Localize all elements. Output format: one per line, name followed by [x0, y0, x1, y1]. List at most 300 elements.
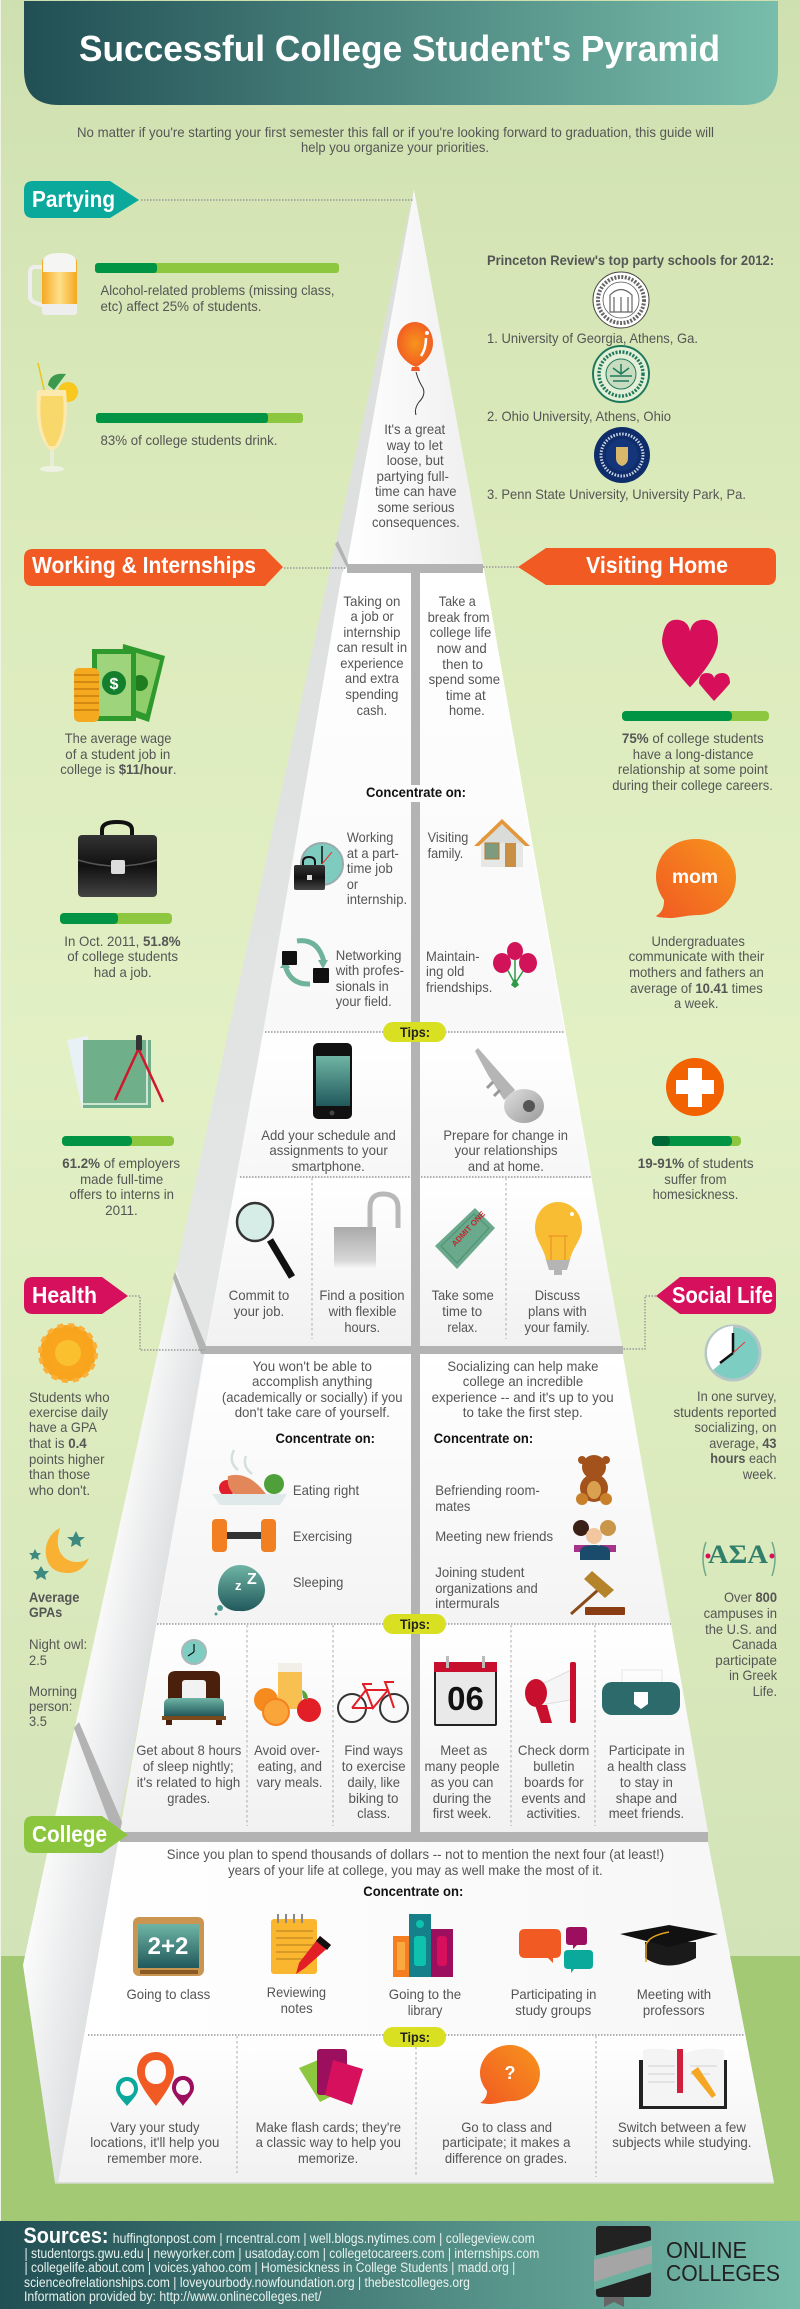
participate text: participate; it makes a — [442, 2134, 571, 2150]
homesickness bar and text: homesickness. — [653, 1186, 738, 1202]
sources: Information provided by: http://www.onlinecolleges.net/ — [24, 2289, 322, 2304]
networking text: your field. — [336, 993, 392, 1009]
study locations text: remember more. — [107, 2150, 202, 2166]
greek life text: Life. — [753, 1683, 777, 1699]
job bar and text — [60, 913, 181, 980]
tag: college — [24, 1816, 128, 1853]
relax text: Take some — [432, 1287, 494, 1303]
icon: sleep cloud — [214, 1565, 265, 1616]
reviewing notes text: Reviewing — [267, 1984, 326, 2000]
health class tip text: shape and — [616, 1790, 677, 1806]
exercise gpa text: who don't. — [28, 1482, 90, 1498]
tag: visiting home: Visiting Home — [586, 552, 728, 578]
working intro text: Taking on — [343, 593, 400, 609]
friendships text: Maintain- — [426, 948, 480, 964]
logo: online colleges — [594, 2226, 780, 2307]
home tip text — [443, 1127, 568, 1174]
tips divider 2: Tips: — [400, 1616, 430, 1632]
icon: balloon — [397, 322, 433, 415]
working intro text: spending — [345, 686, 398, 702]
alcohol bar and text: etc) affect 25% of students. — [100, 298, 262, 314]
greek life text: campuses in — [704, 1605, 777, 1621]
friendships text — [426, 948, 492, 995]
party schools: Princeton Review's top party schools for 2012: — [487, 252, 774, 268]
diet tip text — [254, 1742, 322, 1790]
sleep tip text: it's related to high — [137, 1774, 240, 1790]
tips divider 1: Tips: — [400, 1024, 430, 1040]
socializing text: In one survey, — [697, 1388, 777, 1404]
sources — [24, 2223, 539, 2304]
partying text: way to let — [386, 437, 443, 453]
health class tip text: meet friends. — [609, 1805, 684, 1821]
exercise tip text: Find ways — [344, 1742, 403, 1758]
reviewing notes text: notes — [281, 2000, 313, 2016]
health class tip text: Participate in — [609, 1742, 685, 1758]
exercise gpa text: have a GPA — [29, 1419, 98, 1435]
meet people tip text: many people — [424, 1758, 500, 1774]
relax text — [432, 1287, 494, 1335]
exercise gpa text: Students who — [29, 1389, 110, 1405]
socializing text: week. — [742, 1466, 777, 1482]
working intro text: experience — [340, 655, 404, 671]
exercise gpa text: than those — [29, 1466, 90, 1482]
exercise tip text — [342, 1742, 406, 1821]
icon: teddy bear — [576, 1455, 612, 1505]
befriending text: Befriending room- — [435, 1482, 540, 1498]
joining organizations text: intermurals — [435, 1595, 500, 1611]
study locations text: locations, it'll help you — [90, 2134, 219, 2150]
flash cards text — [256, 2119, 401, 2166]
icon: gym bag — [602, 1670, 680, 1715]
socializing text: hours each — [710, 1450, 776, 1466]
exercise gpa text: that is 0.4 — [29, 1435, 87, 1451]
mom text: mothers and fathers an — [629, 964, 764, 980]
tips divider 3 — [88, 2027, 745, 2177]
flash cards text: memorize. — [298, 2150, 358, 2166]
visiting home intro text: now and — [437, 640, 487, 656]
exercise gpa text: points higher — [29, 1451, 105, 1467]
discuss text: your family. — [524, 1319, 590, 1335]
sleep tip text: of sleep nightly; — [143, 1758, 234, 1774]
partying text: loose, but — [387, 452, 444, 468]
greek life text: in Greek — [729, 1667, 778, 1683]
meeting professors text — [637, 1986, 711, 2018]
college intro text: years of your life at college, you may as well make the most of it. — [228, 1862, 603, 1878]
exercise tip text: daily, like — [347, 1774, 400, 1790]
icon: roses — [493, 942, 537, 988]
icon: calendar — [434, 1656, 497, 1726]
health intro text: You won't be able to — [253, 1358, 372, 1374]
icon: question bubble — [480, 2045, 540, 2104]
visiting family text: Visiting — [428, 829, 468, 845]
tag: social life — [623, 1277, 776, 1349]
exercising text: Exercising — [293, 1528, 352, 1544]
social intro text: to take the first step. — [463, 1404, 583, 1420]
visiting home intro text: home. — [449, 702, 485, 718]
partying text: time can have — [375, 483, 457, 499]
meet people tip text: during the — [433, 1790, 492, 1806]
icon: smartphone — [313, 1043, 352, 1119]
icon: sun — [40, 1325, 96, 1381]
icon: moon and stars — [29, 1528, 89, 1580]
sleeping text: Sleeping — [293, 1574, 343, 1590]
working item text: at a part- — [347, 845, 399, 861]
icon: question bubble: ? — [504, 2063, 516, 2083]
concentrate on heading college: Concentrate on: — [363, 1883, 463, 1899]
joining organizations text: organizations and — [435, 1580, 538, 1596]
study locations text — [90, 2119, 219, 2166]
tips divider 1 — [265, 1022, 565, 1042]
party schools: 3. Penn State University, University Park, Pa. — [487, 486, 746, 502]
icon: graduation cap — [620, 1925, 718, 1966]
library text — [389, 1986, 461, 2018]
befriending text: mates — [435, 1498, 470, 1514]
tips divider 2 — [157, 1614, 671, 1826]
exercise tip text: to exercise — [342, 1758, 406, 1774]
average gpas text: GPAs — [29, 1604, 62, 1620]
smartphone tip text: Add your schedule and — [261, 1127, 396, 1143]
logo: online colleges: ONLINE — [666, 2237, 747, 2263]
icon: drafting tools — [67, 1035, 163, 1108]
health class tip text — [607, 1742, 686, 1821]
icon: magnifier — [237, 1203, 292, 1277]
working intro text: a job or — [350, 608, 394, 624]
relationship bar and text: during their college careers. — [612, 777, 773, 793]
icon: chalkboard — [133, 1917, 204, 1976]
title banner — [24, 1, 778, 105]
study groups text: study groups — [515, 2002, 591, 2018]
relationship bar and text: 75% of college students — [622, 730, 764, 746]
icon: clock and briefcase — [294, 843, 343, 890]
home tip text: your relationships — [455, 1142, 558, 1158]
switch subjects text: subjects while studying. — [612, 2134, 752, 2150]
bulletin tip text: activities. — [526, 1805, 580, 1821]
diet tip text: eating, and — [258, 1758, 322, 1774]
icon: money — [74, 644, 165, 722]
social intro text: experience -- and it's up to you — [432, 1389, 614, 1405]
seal: penn state — [594, 427, 650, 483]
icon: gavel — [571, 1571, 625, 1615]
sleep tip text — [136, 1742, 241, 1806]
job bar and text: In Oct. 2011, 51.8% — [64, 933, 181, 949]
icon: clock — [706, 1326, 760, 1380]
icon: megaphone — [525, 1662, 576, 1723]
mom text: communicate with their — [629, 948, 765, 964]
meet people tip text: Meet as — [440, 1742, 487, 1758]
partying text: partying full- — [376, 468, 449, 484]
joining organizations text — [435, 1564, 538, 1611]
alcohol bar and text — [95, 263, 339, 314]
icon: mom speech bubble: mom — [672, 867, 718, 888]
tag: visiting home — [483, 548, 776, 585]
drinking bar and text — [96, 413, 303, 448]
discuss text: Discuss — [535, 1287, 580, 1303]
exercise gpa text: exercise daily — [29, 1404, 108, 1420]
smartphone tip text: assignments to your — [269, 1142, 388, 1158]
relationship bar and text — [612, 711, 773, 793]
exercise tip text: biking to — [348, 1790, 399, 1806]
flexible hours text: hours. — [344, 1319, 380, 1335]
drinking bar and text: 83% of college students drink. — [100, 432, 278, 448]
tag: partying: Partying — [32, 186, 115, 212]
mom text: a week. — [674, 995, 718, 1011]
intro text: No matter if you're starting your first semester this fall or if you're looking forward to graduation, this guide will — [77, 124, 714, 140]
party schools: 1. University of Georgia, Athens, Ga. — [487, 330, 698, 346]
icon: sleep cloud: z — [235, 1578, 242, 1593]
wage text — [60, 730, 177, 777]
relax text: relax. — [447, 1319, 478, 1335]
relationship bar and text: have a long-distance — [633, 746, 754, 762]
bulletin tip text: Check dorm — [518, 1742, 589, 1758]
visiting home intro text: then to — [442, 656, 483, 672]
internship offers bar and text: made full-time — [80, 1171, 163, 1187]
meeting professors text: Meeting with — [637, 1986, 711, 2002]
social intro text: college an incredible — [463, 1373, 583, 1389]
internship offers bar and text: 2011. — [105, 1202, 138, 1218]
icon: books — [393, 1914, 453, 1977]
commit text: Commit to — [229, 1287, 289, 1303]
health intro text — [222, 1358, 402, 1420]
icon: alpha sigma alpha — [703, 1540, 775, 1576]
health intro text: don't take care of yourself. — [235, 1404, 390, 1420]
switch subjects text — [612, 2119, 752, 2150]
commit text: your job. — [234, 1303, 284, 1319]
icon: map pins — [116, 2052, 194, 2106]
exercise gpa text — [28, 1389, 110, 1498]
visiting home intro text: spend some — [429, 671, 500, 687]
meeting professors text: professors — [643, 2002, 705, 2018]
greek life text: Over 800 — [724, 1589, 777, 1605]
alcohol bar and text: Alcohol-related problems (missing class, — [100, 282, 334, 298]
concentrate on heading social: Concentrate on: — [434, 1430, 533, 1446]
icon: people — [573, 1520, 616, 1560]
sources: Sources: — [24, 2223, 108, 2248]
working intro text — [337, 593, 407, 718]
job bar and text: had a job. — [94, 964, 152, 980]
intro text — [77, 124, 714, 155]
icon: medical cross — [666, 1058, 724, 1116]
exercise tip text: class. — [357, 1805, 390, 1821]
meet people tip text — [424, 1742, 500, 1821]
average gpas text: person: — [29, 1698, 72, 1714]
seal: university of georgia — [593, 272, 649, 328]
greek life text: participate — [715, 1652, 777, 1668]
health class tip text: to stay in — [620, 1774, 673, 1790]
tag: college: College — [32, 1821, 107, 1847]
intro text: help you organize your priorities. — [301, 139, 489, 155]
health class tip text: a health class — [607, 1758, 686, 1774]
working intro text: and extra — [345, 670, 399, 686]
mom text: Undergraduates — [652, 933, 745, 949]
commit text — [229, 1287, 289, 1319]
bulletin tip text — [518, 1742, 589, 1821]
average gpas text — [29, 1589, 87, 1729]
concentrate on heading: Concentrate on: — [366, 784, 466, 800]
party schools — [487, 252, 774, 502]
tag: health — [24, 1277, 205, 1350]
study locations text: Vary your study — [110, 2119, 200, 2135]
socializing text: students reported — [674, 1404, 776, 1420]
wage text: of a student job in — [65, 746, 170, 762]
befriending text — [435, 1482, 540, 1514]
average gpas text: 2.5 — [29, 1652, 47, 1668]
icon: money: $ — [110, 676, 119, 693]
working intro text: internship — [343, 624, 401, 640]
homesickness bar and text: suffer from — [664, 1171, 726, 1187]
average gpas text: Average — [29, 1589, 80, 1605]
icon: notes and pencil — [271, 1914, 331, 1974]
participate text — [442, 2119, 571, 2166]
internship offers bar and text: 61.2% of employers — [62, 1155, 180, 1171]
health intro text: (academically or socially) if you — [222, 1389, 402, 1405]
tag: health: Health — [32, 1282, 97, 1308]
flash cards text: a classic way to help you — [256, 2134, 401, 2150]
friendships text: friendships. — [426, 979, 492, 995]
socializing text: socializing, on — [694, 1419, 776, 1435]
switch subjects text: Switch between a few — [618, 2119, 747, 2135]
tag: social life: Social Life — [672, 1282, 773, 1308]
homesickness bar and text: 19-91% of students — [638, 1155, 754, 1171]
partying text: consequences. — [372, 514, 460, 530]
dividers tier 2 tips — [240, 1177, 591, 1339]
average gpas text: Night owl: — [29, 1636, 87, 1652]
icon: admit ticket: ADMIT ONE — [450, 1209, 488, 1248]
sources: scienceofrelationships.com | loveyourbody.nowfoundation.org | thebestcolleges.org — [24, 2275, 470, 2290]
average gpas text: Morning — [29, 1683, 77, 1699]
meeting friends text: Meeting new friends — [435, 1528, 553, 1544]
average gpas text: 3.5 — [29, 1713, 47, 1729]
meet people tip text: as you can — [431, 1774, 493, 1790]
working item text: Working — [347, 829, 393, 845]
icon: calendar: 06 — [447, 1680, 484, 1717]
home tip text: and at home. — [468, 1158, 544, 1174]
title banner: Successful College Student's Pyramid — [79, 28, 720, 69]
diet tip text: vary meals. — [257, 1774, 322, 1790]
partying text: It's a great — [384, 421, 445, 437]
greek life text: Canada — [732, 1636, 777, 1652]
mom text: average of 10.41 times — [630, 980, 763, 996]
relationship bar and text: relationship at some point — [618, 761, 768, 777]
joining organizations text: Joining student — [435, 1564, 525, 1580]
social intro text — [432, 1358, 614, 1420]
icon: alpha sigma alpha: ΑΣΑ — [708, 1540, 768, 1569]
home tip text: Prepare for change in — [443, 1127, 568, 1143]
working intro text: cash. — [357, 702, 387, 718]
icon: hearts — [662, 620, 730, 701]
sources: huffingtonpost.com | rncentral.com | well.blogs.nytimes.com | collegeview.com — [113, 2231, 535, 2246]
diet tip text: Avoid over- — [254, 1742, 320, 1758]
socializing text: average, 43 — [709, 1435, 777, 1451]
icon: chat bubbles — [519, 1927, 593, 1973]
icon: sleep cloud: Z — [247, 1571, 257, 1588]
meet people tip text: first week. — [433, 1805, 491, 1821]
internship offers bar and text — [62, 1136, 180, 1218]
icon: open book — [639, 2049, 727, 2109]
bulletin tip text: boards for — [524, 1774, 584, 1790]
icon: dumbbell — [212, 1519, 276, 1552]
icon: bicycle — [338, 1682, 408, 1722]
networking text: Networking — [336, 947, 402, 963]
flexible hours text: Find a position — [319, 1287, 405, 1303]
visiting home intro text — [428, 593, 500, 718]
networking text: sionals in — [336, 978, 389, 994]
working intro text: can result in — [337, 639, 407, 655]
eating right text: Eating right — [293, 1482, 359, 1498]
icon: beer mug — [30, 253, 77, 315]
relax text: time to — [442, 1303, 482, 1319]
partying text — [372, 421, 460, 530]
bulletin tip text: events and — [521, 1790, 586, 1806]
icon: key — [475, 1048, 544, 1123]
discuss text — [524, 1287, 590, 1335]
party schools: 2. Ohio University, Athens, Ohio — [487, 408, 671, 424]
visiting family text: family. — [428, 845, 463, 861]
flash cards text: Make flash cards; they're — [256, 2119, 401, 2135]
partying text: some serious — [378, 499, 454, 515]
flexible hours text — [319, 1287, 405, 1335]
icon: food plate — [212, 1450, 287, 1505]
internship offers bar and text: offers to interns in — [69, 1186, 174, 1202]
job bar and text: of college students — [67, 948, 178, 964]
working item text: or — [347, 876, 358, 892]
college intro text: Since you plan to spend thousands of dollars -- not to mention the next four (at least!) — [167, 1846, 664, 1862]
sources: | collegelife.about.com | voices.yahoo.com | Homesickness in College Students | madd.org | — [24, 2260, 515, 2275]
wage text: college is $11/hour. — [60, 761, 177, 777]
visiting home intro text: break from — [428, 609, 490, 625]
working item text: time job — [347, 860, 393, 876]
networking text: with profes- — [335, 962, 404, 978]
seal: ohio university — [593, 346, 649, 402]
logo: online colleges: COLLEGES — [666, 2260, 780, 2286]
study groups text: Participating in — [511, 1986, 596, 2002]
concentrate on heading health: Concentrate on: — [276, 1430, 375, 1446]
sleep tip text: Get about 8 hours — [136, 1742, 241, 1758]
tips divider 3: Tips: — [400, 2029, 430, 2045]
icon: light bulb — [535, 1202, 582, 1275]
icon: admit ticket — [435, 1208, 495, 1269]
icon: cocktail — [36, 363, 78, 472]
library text: Going to the — [389, 1986, 461, 2002]
icon: flash cards — [299, 2049, 363, 2105]
library text: library — [408, 2002, 442, 2018]
participate text: Go to class and — [461, 2119, 552, 2135]
tag: working and internships: Working & Internships — [32, 552, 256, 578]
icon: house — [474, 819, 530, 867]
bulletin tip text: bulletin — [533, 1758, 574, 1774]
wage text: The average wage — [65, 730, 172, 746]
working item text — [347, 829, 407, 907]
sleep tip text: grades. — [167, 1790, 210, 1806]
visiting home intro text: time at — [446, 687, 486, 703]
homesickness bar and text — [638, 1136, 754, 1202]
study groups text — [511, 1986, 596, 2018]
college intro text — [167, 1846, 664, 1878]
health intro text: accomplish anything — [252, 1373, 372, 1389]
icon: networking — [280, 941, 329, 984]
visiting home intro text: Take a — [439, 593, 476, 609]
icon: mom speech bubble — [656, 839, 736, 918]
tag: partying — [24, 181, 414, 218]
reviewing notes text — [267, 1984, 326, 2016]
icon: chalkboard: 2+2 — [148, 1933, 188, 1960]
tag: working and internships — [24, 549, 347, 586]
icon: open lock — [334, 1194, 398, 1268]
icon: fruit and juice — [254, 1663, 321, 1725]
going to class text: Going to class — [126, 1986, 210, 2002]
greek life text: the U.S. and — [705, 1621, 777, 1637]
participate text: difference on grades. — [445, 2150, 567, 2166]
sources: | studentorgs.gwu.edu | newyorker.com | usatoday.com | collegetocareers.com | internships.com — [24, 2246, 539, 2261]
